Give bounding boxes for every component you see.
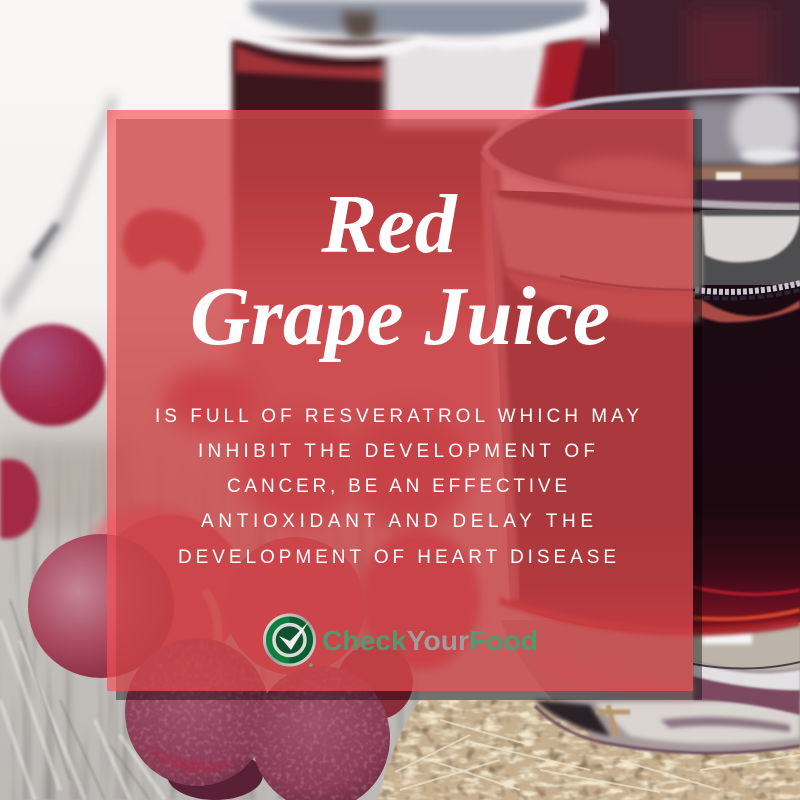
back glass of juice <box>228 0 800 460</box>
logo: CheckYourFood <box>263 614 538 667</box>
title: Red <box>320 178 459 271</box>
wooden table <box>0 0 600 800</box>
wordmark: CheckYourFood <box>322 625 538 656</box>
body text: ANTIOXIDANT AND DELAY THE <box>201 511 593 532</box>
body text: DEVELOPMENT OF HEART DISEASE <box>178 547 616 568</box>
icon: check badge <box>263 614 316 667</box>
burlap cloth <box>370 695 800 800</box>
red translucent panel <box>107 110 693 691</box>
grapes <box>0 209 480 800</box>
title: Grape Juice <box>190 270 610 363</box>
body text <box>155 406 639 568</box>
body text: INHIBIT THE DEVELOPMENT OF <box>198 441 595 462</box>
body text: IS FULL OF RESVERATROL WHICH MAY <box>155 406 639 427</box>
panel shadow <box>116 119 702 700</box>
title <box>190 178 610 363</box>
front glass of juice <box>484 90 800 753</box>
body text: CANCER, BE AN EFFECTIVE <box>227 476 567 497</box>
